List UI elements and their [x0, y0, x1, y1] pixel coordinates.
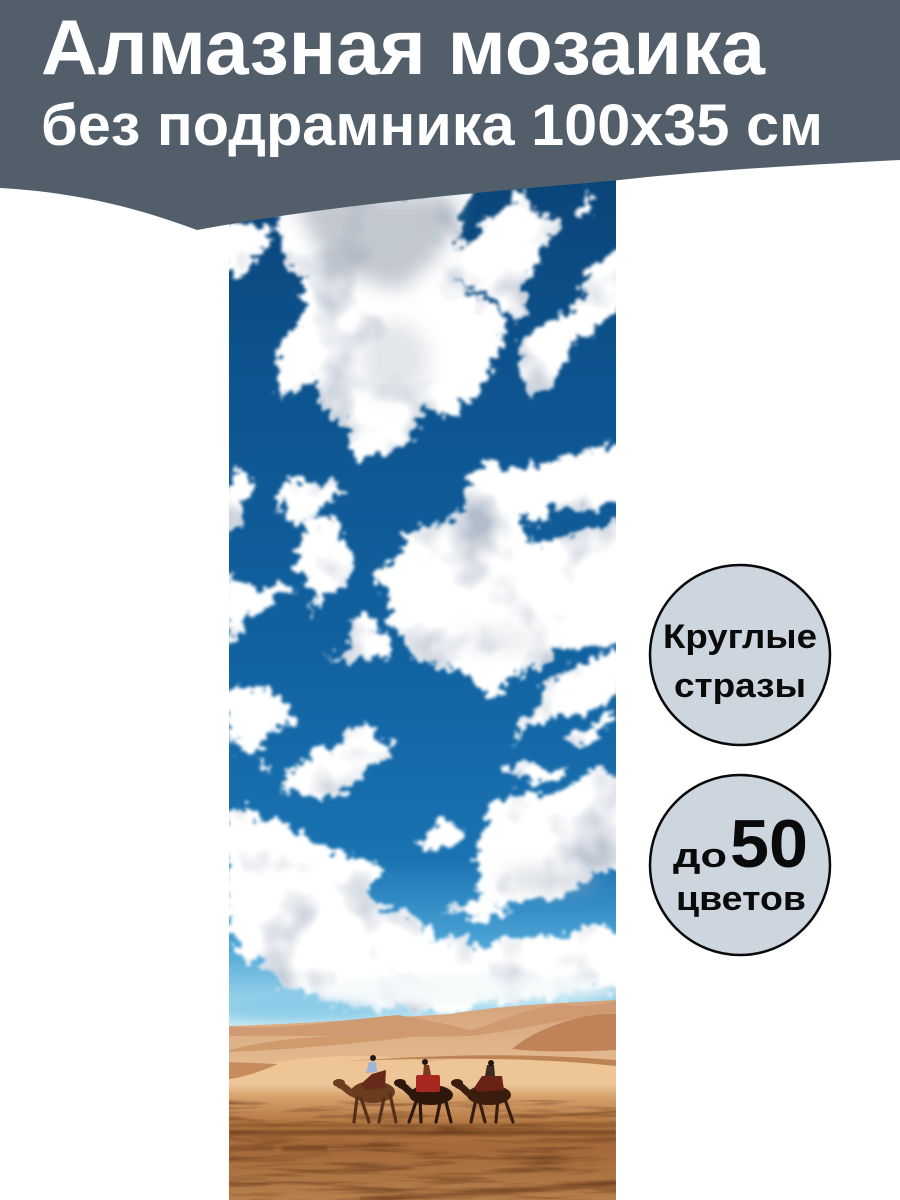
sky background	[229, 170, 616, 1030]
picture: desert sky with caravan	[220, 170, 625, 1200]
clouds	[225, 188, 625, 1012]
badge: up to 50 colours: до	[673, 837, 727, 875]
badge: up to 50 colours: 50	[730, 806, 808, 882]
camel caravan	[333, 1055, 513, 1122]
badge: round rhinestones: Круглые	[663, 618, 817, 656]
desert dunes	[229, 1000, 616, 1084]
cloud shading	[290, 195, 600, 890]
subtitle: без подрамника 100х35 см	[41, 93, 823, 158]
sandy foreground	[229, 1084, 616, 1200]
badge: round rhinestones: стразы	[674, 667, 806, 705]
banner	[0, 0, 900, 230]
camel 3	[451, 1060, 513, 1122]
badge: round rhinestones	[650, 565, 830, 745]
camel 2	[394, 1059, 453, 1122]
badge: up to 50 colours: цветов	[676, 880, 806, 918]
title: Алмазная мозаика	[41, 3, 766, 91]
camel 1	[333, 1055, 396, 1122]
sky haze at horizon	[220, 976, 620, 1022]
badge: up to 50 colours	[650, 775, 830, 955]
